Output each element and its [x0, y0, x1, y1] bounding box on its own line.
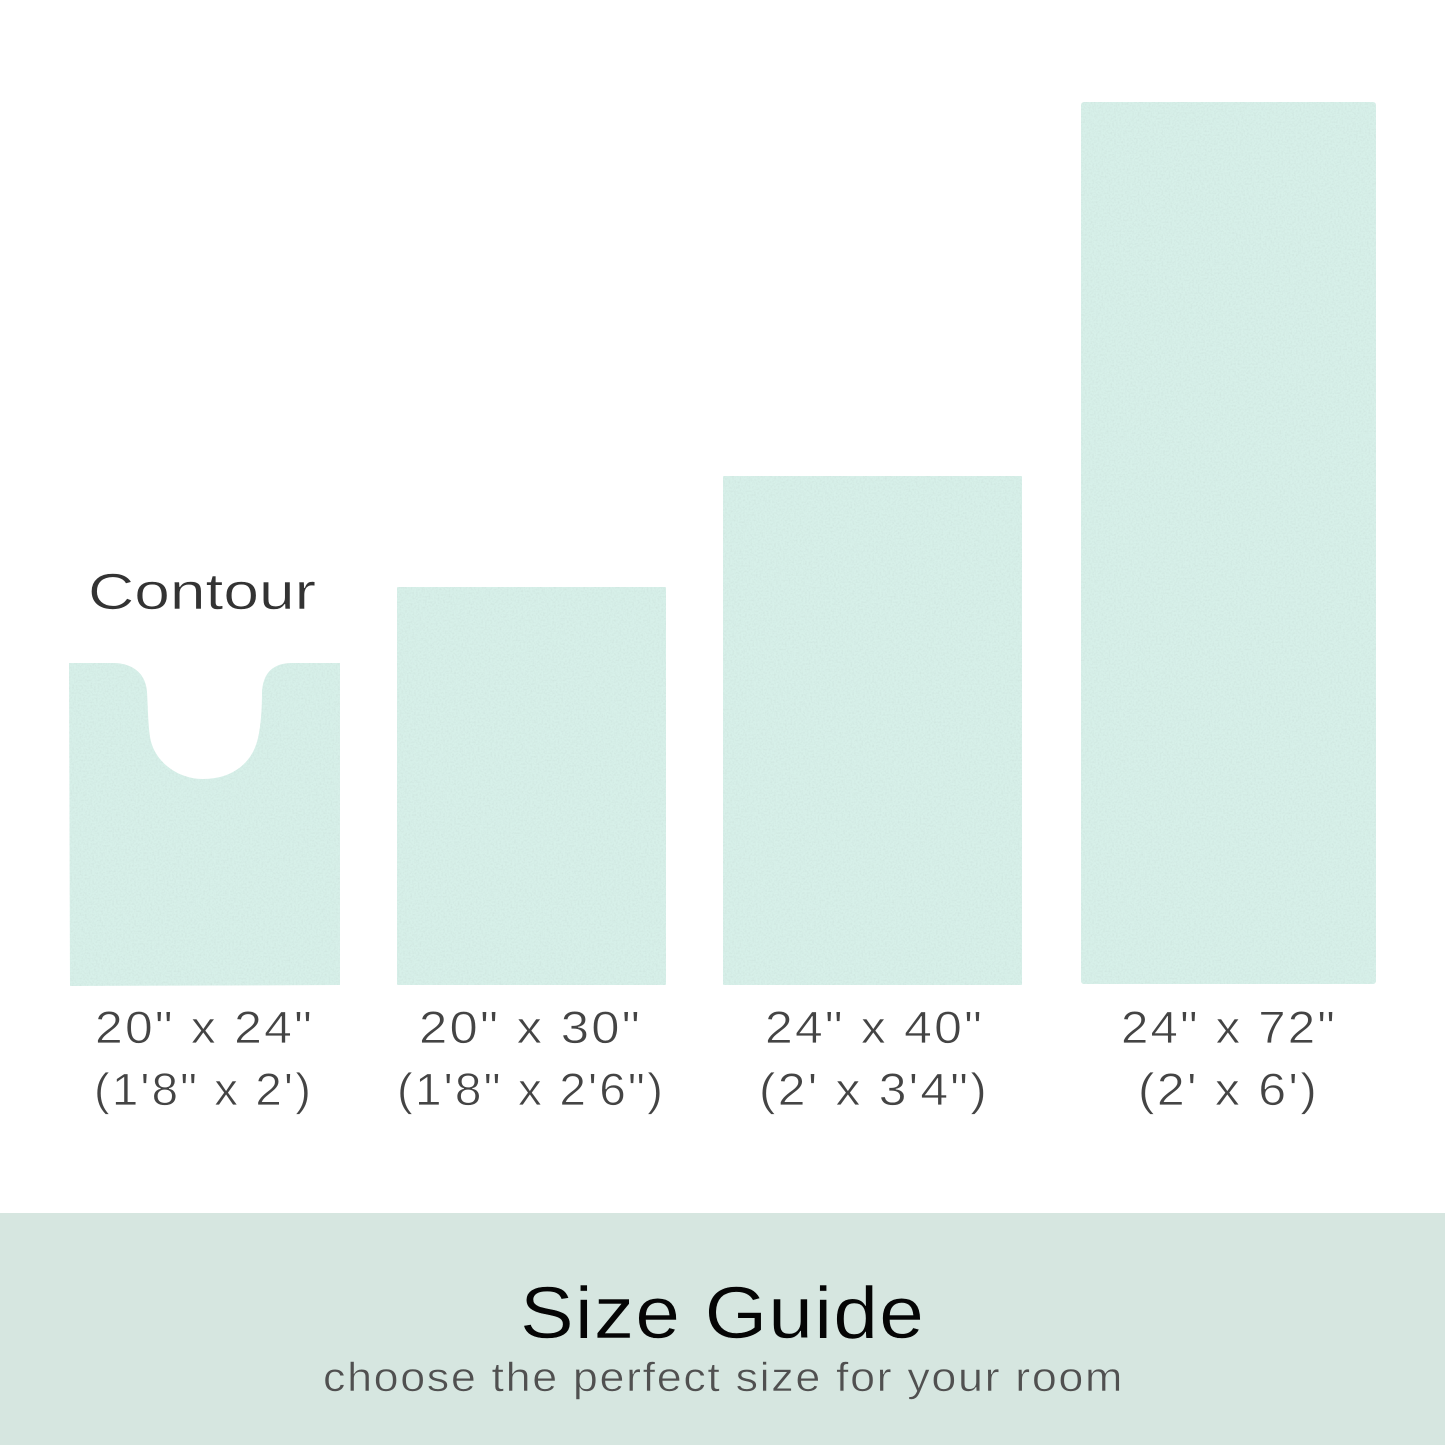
rug: 24 x 40: [723, 476, 1022, 985]
size label: 24 x 72 rug: (2' x 6'): [1138, 1064, 1319, 1115]
subtitle: choose the perfect size for your room: [323, 1354, 1124, 1400]
size label: contour rug: 20" x 24": [95, 1002, 314, 1053]
size label: 24 x 40 rug: 24" x 40": [765, 1002, 984, 1053]
size label: 24 x 40 rug: (2' x 3'4"): [759, 1064, 989, 1115]
title: Size Guide: [520, 1273, 925, 1354]
size label: 20 x 30 rug: (1'8" x 2'6"): [397, 1064, 665, 1115]
rug: 24 x 72: [1081, 102, 1376, 984]
size label: 20 x 30 rug: 20" x 30": [419, 1002, 642, 1053]
label: Contour: Contour: [88, 563, 316, 620]
size label: contour rug: [94, 1002, 314, 1115]
size label: 24 x 72 rug: [1121, 1002, 1337, 1115]
rug: contour 20 x 24: [69, 663, 340, 986]
size label: 24 x 40 rug: [759, 1002, 989, 1115]
rug: 20 x 30: [397, 587, 666, 985]
size label: 20 x 30 rug: [397, 1002, 665, 1115]
size label: contour rug: (1'8" x 2'): [94, 1064, 313, 1115]
footer band: [0, 1213, 1445, 1445]
size label: 24 x 72 rug: 24" x 72": [1121, 1002, 1337, 1053]
